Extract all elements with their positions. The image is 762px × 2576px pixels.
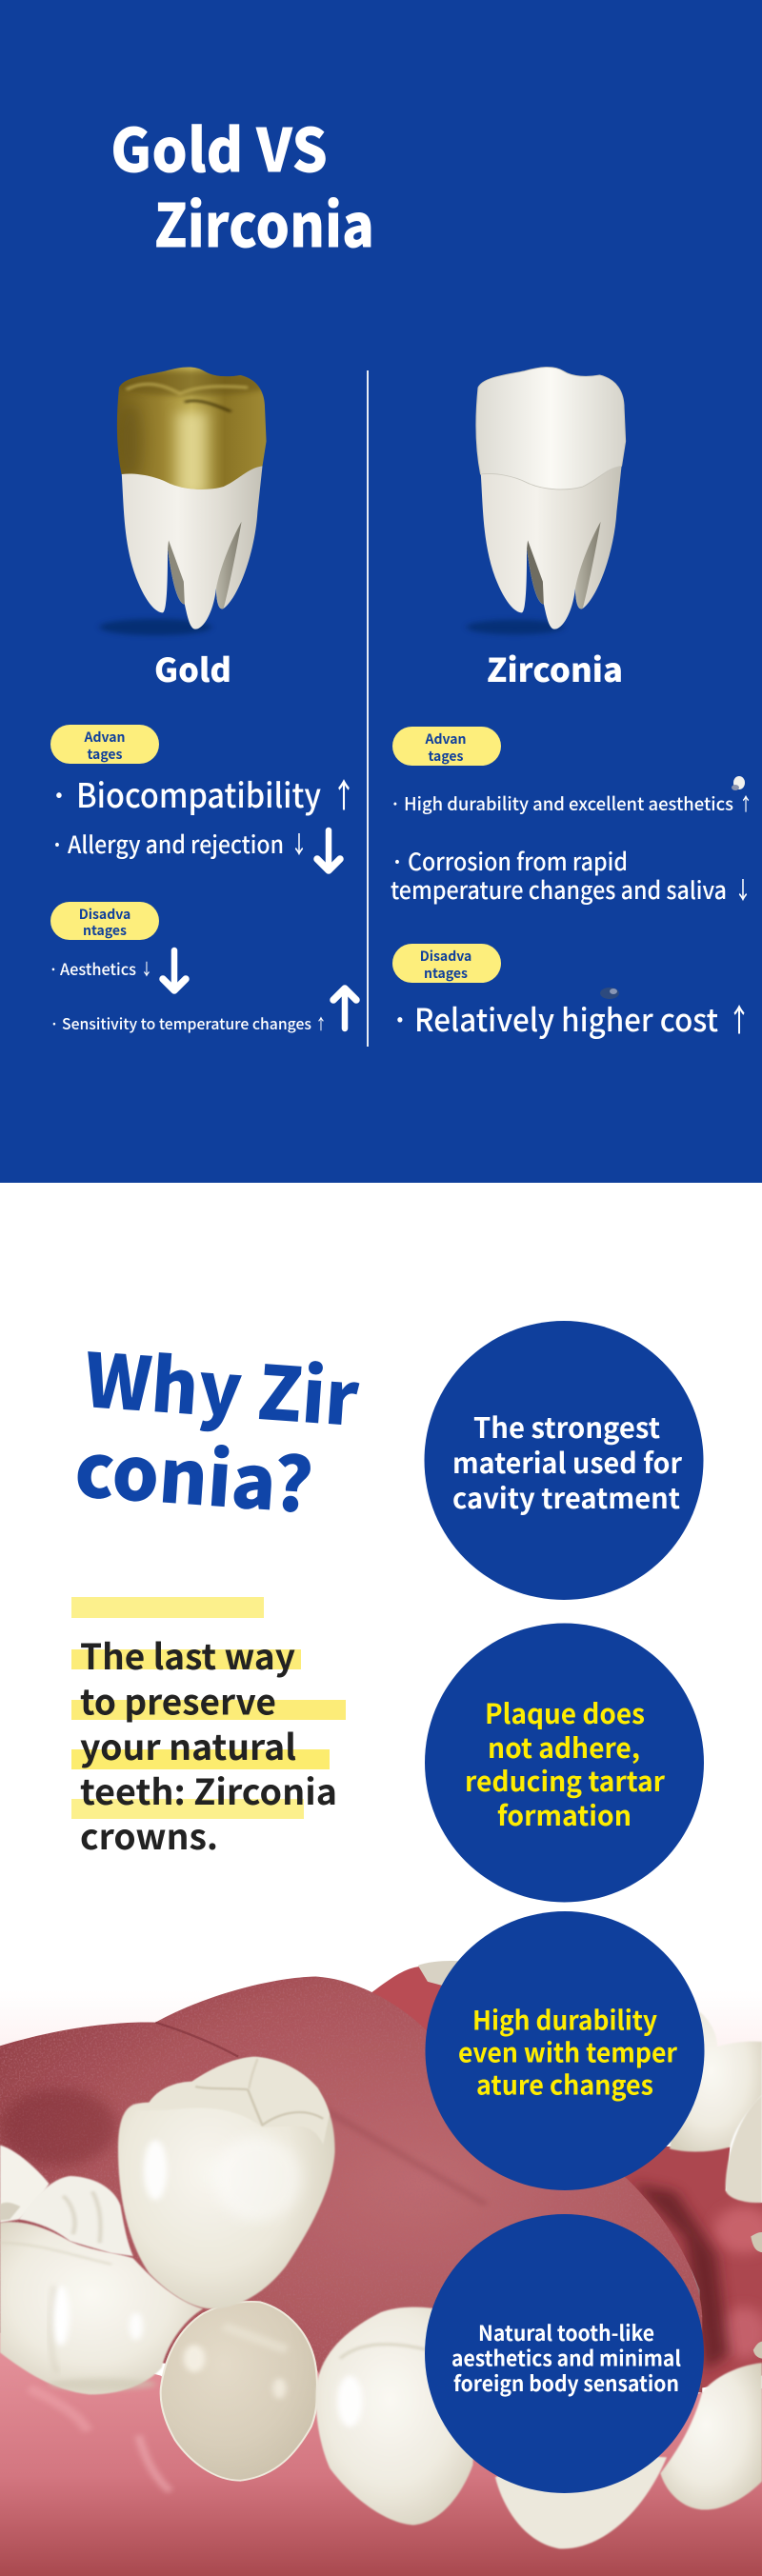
text: relatively higher cost: ↑ [728, 996, 751, 1041]
circle: plaque does not adhere: reducing tartar [465, 1760, 665, 1800]
illustration: dental crown over prepared tooth [0, 1960, 762, 2576]
text block: last way to preserve natural teeth, with highlights: teeth: Zirconia [80, 1764, 337, 1815]
circle: plaque does not adhere: formation [497, 1794, 632, 1834]
pill: zirconia advantages: Advan [425, 729, 466, 749]
text: aesthetics: ↓ [141, 957, 152, 981]
circle: high durability: High durability [472, 2000, 657, 2038]
text: relatively higher cost: Relatively higher cost [414, 995, 718, 1041]
center lower tooth [495, 2452, 667, 2548]
heading: why zirconia: conia? [71, 1411, 317, 1534]
text: corrosion from rapid temperature changes and saliva: ↓ [734, 872, 752, 907]
icon: zirconia crown tooth [467, 368, 626, 634]
text: aesthetics: Aesthetics [60, 956, 136, 980]
lower gum [0, 2333, 762, 2576]
circle: strongest material: material used for [452, 1442, 682, 1482]
text: corrosion from rapid temperature changes and saliva [391, 844, 752, 907]
pill: gold disadvantages [50, 902, 159, 940]
circle: plaque does not adhere [425, 1623, 704, 1903]
text: relatively higher cost: · [391, 995, 409, 1041]
text: sensitivity to temperature changes: ↑ [315, 1011, 327, 1034]
pill: gold advantages: tages [87, 745, 123, 764]
upper back gum [371, 1960, 486, 2076]
text block: last way to preserve natural teeth, with highlights: your natural [80, 1719, 296, 1770]
title [110, 103, 374, 265]
pill: gold disadvantages: Disadva [79, 905, 130, 924]
circle: plaque does not adhere: Plaque does [485, 1692, 645, 1732]
pill: zirconia advantages [392, 727, 501, 766]
pill: zirconia disadvantages [392, 944, 501, 983]
icon: small tooth fragment [732, 776, 745, 790]
text: corrosion from rapid temperature changes and saliva: Corrosion from rapid [408, 844, 628, 878]
text block: last way to preserve natural teeth, with highlights: The last way [80, 1628, 295, 1680]
rear gum right [622, 2147, 762, 2388]
pill: gold advantages [50, 725, 159, 764]
text: aesthetics: · [49, 956, 58, 980]
text: corrosion from rapid temperature changes and saliva: temperature changes and saliva [391, 872, 727, 907]
tongue [0, 1977, 702, 2393]
text: allergy and rejection: ↓ [291, 827, 308, 861]
circle: high durability: ature changes [476, 2065, 653, 2103]
circle: high durability: even with temper [458, 2032, 678, 2070]
prepared tooth stump [161, 2302, 317, 2481]
heading: why zirconia [71, 1322, 363, 1534]
pill: zirconia disadvantages: ntages [424, 964, 468, 983]
left front molar [0, 2222, 203, 2394]
center divider line [367, 370, 369, 1047]
arrow: medium down [163, 950, 186, 990]
floating zirconia crown [118, 2057, 335, 2308]
background fade [0, 1990, 762, 2050]
circle: natural tooth-like aesthetics: aesthetics and minimal [451, 2343, 681, 2373]
panel background [0, 0, 762, 1183]
left back molar [19, 2176, 133, 2256]
text: sensitivity to temperature changes: Sensitivity to temperature changes [62, 1011, 311, 1034]
title: Zirconia [154, 179, 374, 265]
text: high durability and excellent aesthetics: · [391, 790, 400, 816]
tooth right of stump [316, 2307, 481, 2525]
pill: gold disadvantages: ntages [83, 921, 127, 940]
right lower tooth [660, 2363, 762, 2509]
text block: last way to preserve natural teeth, with highlights: to preserve [80, 1674, 276, 1726]
panel: gold vs zirconia comparison [0, 0, 762, 1183]
panel: why zirconia [71, 1322, 363, 1860]
icon: gold crown tooth [100, 368, 274, 635]
rear tooth top [418, 1961, 459, 1988]
text: high durability and excellent aesthetics: High durability and excellent aesthetics [404, 790, 733, 816]
circle: strongest material [425, 1321, 703, 1600]
text: sensitivity to temperature changes: · [50, 1011, 59, 1034]
pill: zirconia disadvantages: Disadva [420, 947, 471, 966]
text: biocompatibility: ↑ [332, 769, 355, 817]
circle: strongest material: The strongest [473, 1407, 660, 1447]
arrow: large down [317, 830, 340, 870]
circle: high durability [425, 1911, 705, 2190]
text: high durability and excellent aesthetics: ↑ [739, 789, 752, 816]
pill: zirconia advantages: tages [428, 747, 464, 766]
yellow accent bar [71, 1597, 264, 1618]
heading: why zirconia: Why Zir [81, 1322, 363, 1448]
left far molar [0, 2146, 50, 2223]
text block: last way to preserve natural teeth, with highlights [71, 1628, 346, 1860]
rear teeth right [670, 2011, 762, 2151]
arrow: large up [333, 988, 356, 1028]
pill: gold advantages: Advan [84, 728, 125, 747]
circle: natural tooth-like aesthetics [425, 2214, 704, 2493]
icon: small dark fragment [600, 988, 619, 999]
circle: strongest material: cavity treatment [452, 1477, 680, 1517]
label: Zirconia: Zirconia [487, 645, 623, 691]
circle: natural tooth-like aesthetics: foreign body sensation [453, 2367, 679, 2398]
text: corrosion from rapid temperature changes and saliva: · [391, 844, 404, 878]
title: Gold VS [110, 103, 328, 190]
label: Gold: Gold [154, 645, 231, 691]
text: allergy and rejection: · [50, 827, 64, 861]
text: biocompatibility: Biocompatibility [76, 769, 321, 818]
text block: last way to preserve natural teeth, with highlights: crowns. [80, 1808, 218, 1860]
circle: natural tooth-like aesthetics: Natural tooth-like [478, 2317, 654, 2347]
text: allergy and rejection: Allergy and rejection [68, 827, 284, 861]
circle: plaque does not adhere: not adhere, [488, 1727, 640, 1767]
text: biocompatibility: · [50, 769, 69, 818]
